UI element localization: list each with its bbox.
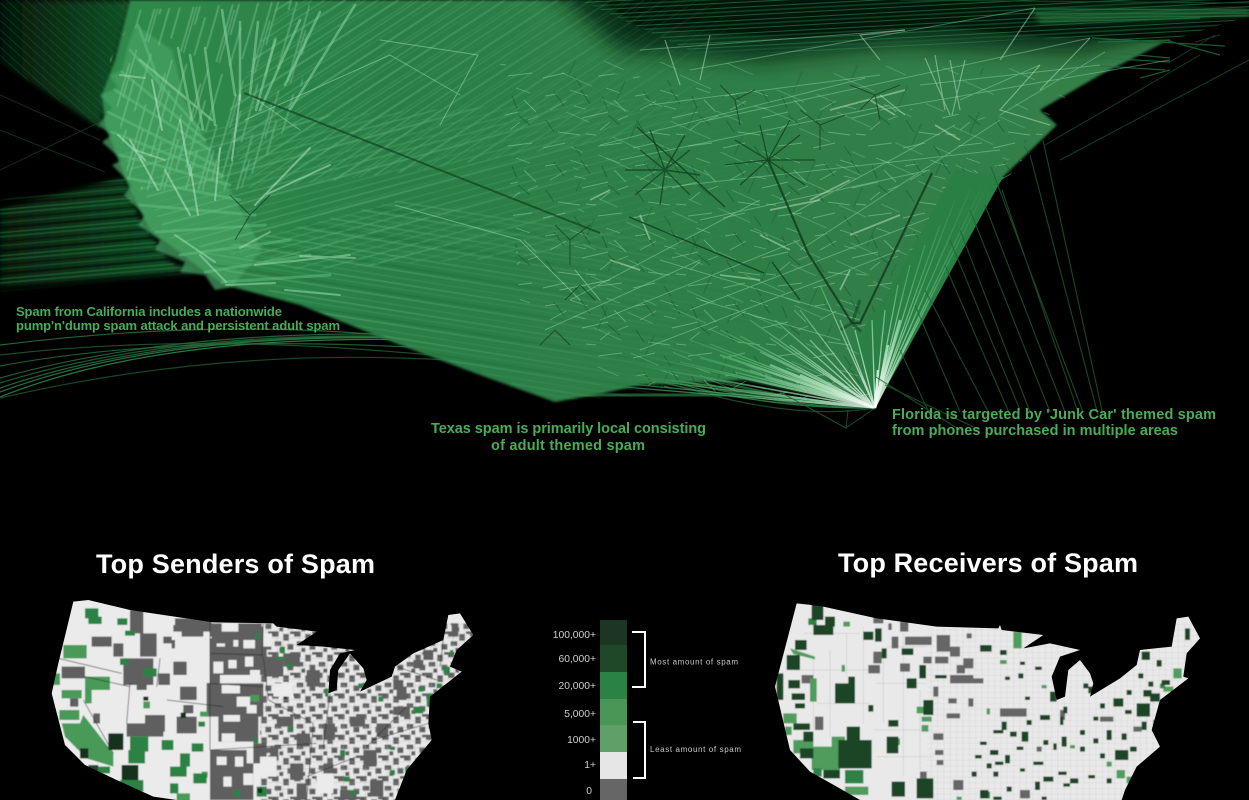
main body of spam connections	[102, 0, 1165, 408]
pale west coast fringe	[98, 25, 262, 290]
annotation: Florida	[892, 407, 1216, 439]
map: top receivers of spam	[775, 603, 1200, 800]
Florida fan of connections	[580, 160, 1003, 428]
legend colour bar	[600, 620, 627, 800]
legend value labels: 100,000+	[553, 630, 596, 641]
heading: top senders: Top Senders of Spam	[96, 549, 375, 579]
map: top senders of spam	[52, 600, 474, 800]
outer rays left of the west coast	[0, 0, 195, 292]
streams along the top and right edges	[580, 0, 1249, 160]
dark hubs and dark connection lines	[230, 85, 932, 345]
legend: spam scale	[553, 620, 741, 800]
green counties, light	[783, 622, 1182, 800]
annotation: Texas	[431, 421, 706, 454]
California spam streak textures	[110, 0, 702, 400]
annotation: Texas: Texas spam is primarily local consisting	[431, 421, 706, 437]
long arcs from the west into Florida	[0, 329, 875, 412]
state borders	[58, 623, 443, 800]
annotation: Florida: Florida is targeted by 'Junk Car' themed spam	[892, 407, 1216, 423]
grey counties with no spam	[802, 617, 1142, 798]
legend value labels	[553, 630, 596, 797]
green counties, medium	[85, 608, 453, 797]
eastern dark counties	[972, 660, 1170, 800]
legend value labels: 1+	[584, 760, 596, 771]
legend value labels: 20,000+	[558, 681, 596, 692]
annotation: California	[16, 304, 340, 333]
spam network map	[0, 0, 1249, 430]
fine network texture	[500, 60, 1090, 405]
extra grey county clusters in the east	[270, 623, 458, 800]
green counties, dark	[88, 765, 98, 772]
thin rays east of Florida	[876, 140, 1103, 430]
annotation: Texas: of adult themed spam	[491, 438, 645, 454]
annotation: California: pump'n'dump spam attack and persistent adult spam	[16, 318, 340, 333]
eastern county checker	[260, 623, 480, 800]
grey counties with no spam	[62, 610, 283, 800]
annotation: Florida: from phones purchased in multiple areas	[892, 423, 1178, 439]
bracket: most amount of spam: Most amount of spam	[650, 658, 738, 666]
bracket: least amount of spam: Least amount of spam	[650, 745, 741, 754]
legend value labels: 0	[586, 786, 592, 797]
legend value labels: 60,000+	[558, 654, 596, 665]
darker top of the web	[520, 0, 1200, 60]
green counties, light	[52, 645, 259, 800]
county grid	[927, 623, 1210, 800]
green counties, medium	[808, 618, 1165, 798]
bracket: most amount of spam	[632, 632, 738, 687]
bright lines in the central and eastern web	[545, 8, 1170, 350]
bracket: least amount of spam	[633, 722, 741, 778]
bright spikes from California	[108, 5, 610, 300]
legend value labels: 5,000+	[564, 709, 596, 720]
annotation: California: Spam from California includes a nationwide	[16, 304, 282, 319]
heading: top receivers: Top Receivers of Spam	[838, 548, 1138, 578]
legend value labels: 1000+	[567, 735, 596, 746]
white counties inside the plains	[145, 618, 333, 793]
green counties, dark	[777, 603, 1190, 798]
western county lines	[793, 627, 933, 777]
